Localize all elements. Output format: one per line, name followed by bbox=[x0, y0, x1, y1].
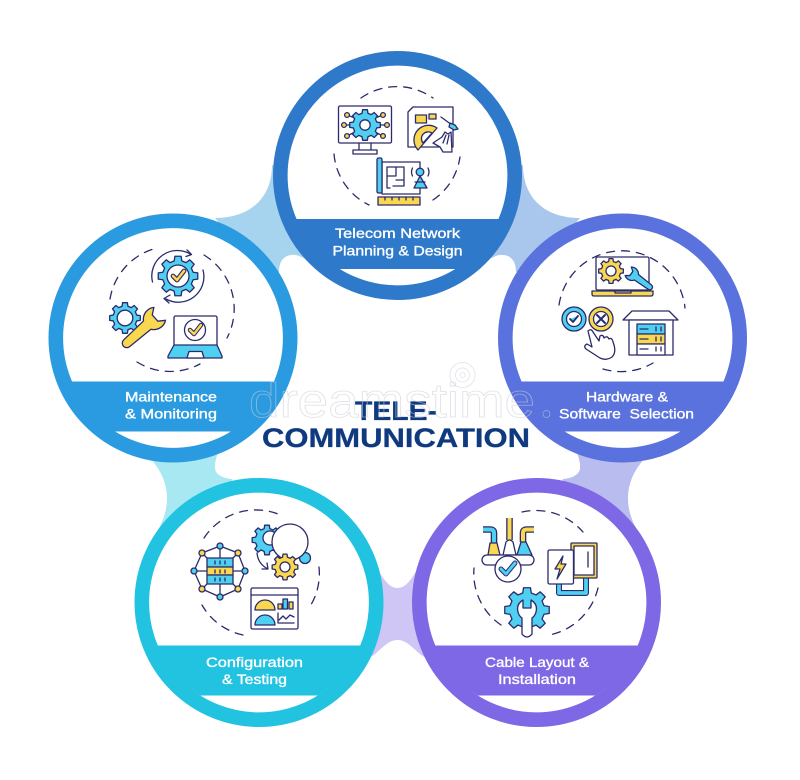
icon: monitor with gear bbox=[338, 106, 392, 154]
icon: drafting sheet with protractor bbox=[408, 107, 458, 152]
label text: & Testing bbox=[222, 671, 287, 687]
label band bbox=[522, 382, 723, 431]
label text bbox=[559, 388, 694, 422]
panel: configuration and testing bbox=[142, 485, 376, 720]
icon: gears with magnifier bbox=[252, 524, 310, 580]
panel: maintenance and monitoring bbox=[56, 221, 290, 455]
label text: Installation bbox=[498, 671, 576, 687]
ring bbox=[56, 221, 290, 455]
icon: gear with check and cycle arrows bbox=[152, 250, 204, 303]
label text bbox=[125, 388, 217, 422]
title: COMMUNICATION bbox=[262, 423, 530, 453]
ring bbox=[419, 485, 654, 720]
label text: & Monitoring bbox=[125, 406, 217, 422]
ring bbox=[280, 58, 515, 293]
connector: bottom left to bottom right bbox=[365, 566, 430, 660]
label band bbox=[72, 382, 274, 431]
label text bbox=[206, 654, 303, 687]
connector: top to right bbox=[465, 165, 580, 272]
label text: Telecom Network bbox=[335, 225, 461, 241]
icon: dashboard bbox=[251, 588, 298, 629]
panel: telecom network planning and design bbox=[280, 58, 515, 293]
title bbox=[262, 396, 530, 453]
dashed circle bbox=[559, 251, 685, 372]
title: TELE- bbox=[355, 396, 437, 426]
label band bbox=[436, 646, 637, 695]
label text: Software Selection bbox=[559, 406, 694, 422]
ring bbox=[142, 485, 376, 720]
label text bbox=[485, 654, 590, 687]
icon: cables with power strip and check bbox=[482, 518, 534, 582]
connector: top to left bbox=[215, 165, 330, 272]
watermark: dreamstime bbox=[249, 375, 535, 428]
watermark bbox=[249, 362, 550, 428]
label text: Cable Layout & bbox=[485, 654, 590, 670]
connector: right to bottom right bbox=[555, 440, 645, 560]
label text: Hardware & bbox=[586, 388, 669, 404]
icon: choice buttons with hand bbox=[562, 307, 615, 359]
icon: laptop with check bbox=[168, 316, 222, 358]
label text: Configuration bbox=[206, 654, 303, 670]
icon: gear with wrench bbox=[505, 588, 549, 637]
dashed circle bbox=[474, 510, 598, 635]
icon: floor plan with tower and ruler bbox=[377, 158, 429, 205]
label band bbox=[158, 646, 360, 695]
connector: left to bottom left bbox=[150, 440, 240, 560]
icon: laptop with gear and wrench bbox=[592, 257, 656, 296]
icon: gear with wrench bbox=[110, 303, 167, 354]
label text: Planning & Design bbox=[332, 242, 462, 258]
icon: server network bbox=[191, 543, 248, 600]
ring bbox=[505, 221, 740, 455]
icon: power panel bbox=[548, 543, 597, 593]
icon: server warehouse bbox=[623, 311, 678, 355]
label band bbox=[297, 220, 498, 268]
label text bbox=[332, 225, 462, 258]
panel: cable layout and installation bbox=[419, 485, 654, 720]
dashed circle bbox=[110, 248, 234, 371]
dashed circle bbox=[202, 510, 319, 635]
label text: Maintenance bbox=[125, 388, 217, 404]
panel: hardware and software selection bbox=[505, 221, 740, 455]
dashed circle bbox=[334, 87, 460, 205]
